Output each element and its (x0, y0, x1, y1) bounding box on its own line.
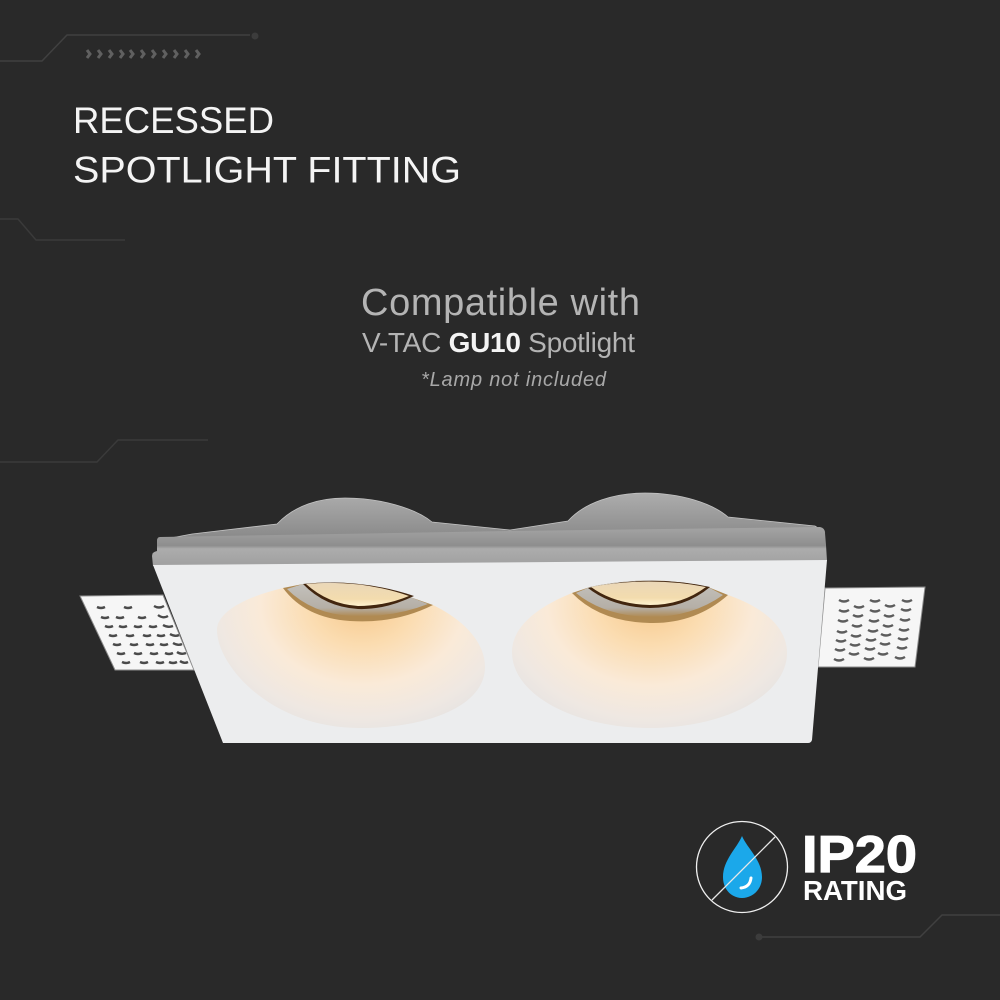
left recess with lamp (217, 582, 485, 728)
circuit line: upper left (0, 219, 125, 240)
compatibility text: Compatible with (361, 282, 640, 324)
compatibility text (361, 282, 640, 391)
rating label: RATING (803, 875, 907, 906)
right mounting tab (818, 587, 925, 667)
title: RECESSED (73, 100, 274, 141)
IP20 rating badge (696, 822, 917, 912)
compatibility text: V-TAC GU10 Spotlight (362, 327, 635, 358)
icon: crossed water drop (696, 822, 788, 912)
fitting front face (153, 560, 827, 743)
chevron row (87, 50, 199, 58)
circuit line: bottom right (756, 915, 1000, 940)
right GU10 lamp (572, 580, 728, 623)
compatibility text: *Lamp not included (421, 369, 607, 391)
left recess (217, 588, 485, 728)
title: SPOTLIGHT FITTING (73, 150, 461, 190)
right recess (512, 593, 787, 728)
title (73, 100, 461, 190)
circuit line: middle left (0, 440, 208, 462)
right recess with lamp (512, 580, 787, 728)
fitting top edge (152, 527, 827, 566)
rear dome housings (160, 493, 824, 540)
left GU10 lamp (283, 582, 433, 621)
circuit line: top left (0, 32, 258, 61)
product: double recessed fitting (80, 493, 925, 743)
IP20 label: IP20 (802, 826, 917, 884)
left mounting tab (80, 595, 194, 670)
